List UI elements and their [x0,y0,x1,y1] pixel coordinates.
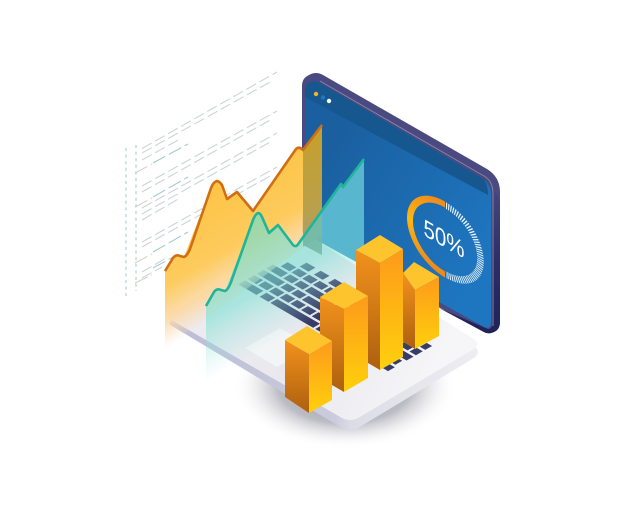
laptop top surface [169,232,478,420]
bar 4 [403,262,439,349]
teal fill over orange on screen [303,212,322,255]
laptop base [169,232,478,430]
teal fill over screen [322,159,364,266]
gauge 50% [410,184,480,295]
bar 1 [285,326,332,413]
frame highlight [320,81,493,326]
screen [302,73,500,333]
teal fill [206,159,364,385]
screen face [302,81,491,328]
gauge tick arc [446,206,480,294]
teal line [206,159,364,306]
orange area chart [165,125,322,350]
frame dark side [439,190,500,333]
title bar [305,81,488,195]
keyboard [242,256,438,369]
orange line [165,125,322,271]
ground shadow [233,321,457,449]
orange fill over screen [303,125,322,247]
trackpad [245,328,312,367]
screen frame [302,73,500,333]
gauge label: 50% [423,215,464,264]
bar 2 [320,282,368,392]
code lines [126,72,277,296]
bar 3 [356,235,403,370]
gauge orange arc [410,184,445,274]
teal area chart [206,159,364,385]
window dots [314,92,331,103]
orange fill [165,148,303,350]
laptop side edge [170,240,478,430]
